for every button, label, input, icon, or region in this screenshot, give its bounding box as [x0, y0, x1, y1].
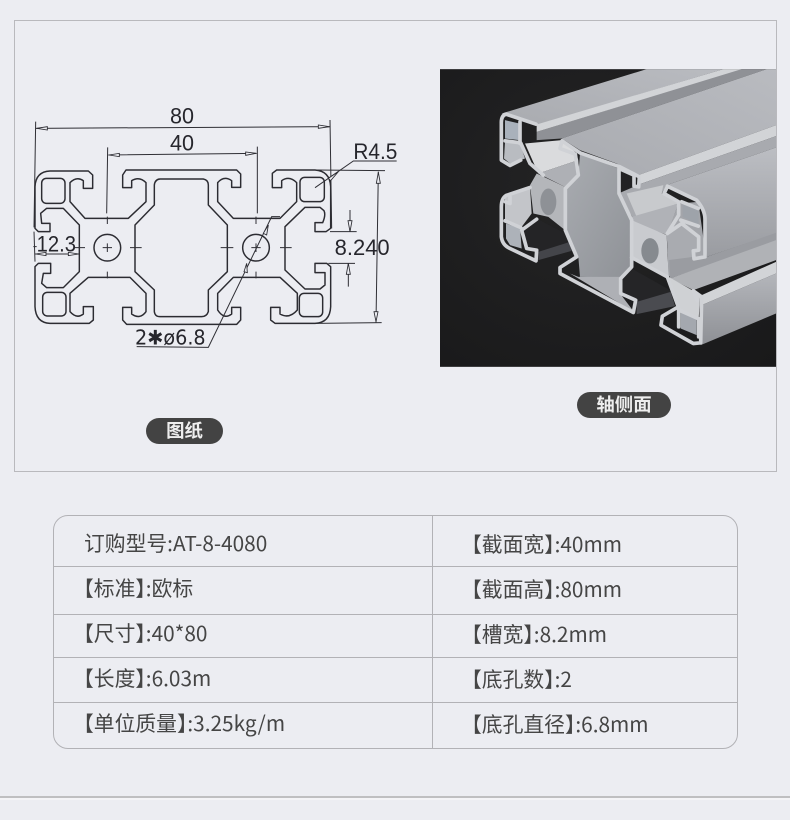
spec: section width: 【截面宽】:40mm	[461, 528, 622, 558]
badge: axial side view	[577, 392, 671, 418]
dimension labels: 2✱ø6.8	[135, 326, 206, 350]
spec: size: 【尺寸】:40*80	[73, 617, 207, 647]
profile outline	[35, 170, 331, 324]
badge: axial side view: 轴侧面	[596, 391, 652, 417]
dimension labels: 40	[170, 131, 194, 156]
badge: drawing	[146, 418, 223, 444]
dimension labels: 80	[170, 103, 194, 128]
spec: order number: 订购型号:AT-8-4080	[84, 527, 267, 557]
cut section thin walls	[501, 114, 705, 344]
dimension labels	[37, 103, 397, 350]
spec: section height: 【截面高】:80mm	[461, 573, 622, 603]
technical drawing of 4080 profile	[33, 103, 397, 350]
dimension labels: 12.3	[37, 231, 76, 256]
dimension arrowheads	[36, 125, 380, 322]
extrusion long faces	[502, 69, 776, 345]
table frame	[53, 515, 738, 749]
column divider	[432, 516, 433, 748]
dimension labels: 8.240	[335, 235, 390, 260]
central hollow interior	[565, 154, 632, 277]
spec: length: 【长度】:6.03m	[73, 662, 211, 692]
bore holes	[94, 234, 269, 261]
spec: bottom hole diameter: 【底孔直径】:6.8mm	[461, 708, 649, 738]
spec: unit mass: 【单位质量】:3.25kg/m	[73, 707, 285, 737]
dimension lines	[33, 120, 397, 347]
central hollow	[135, 179, 227, 317]
panel: drawing and photo frame	[14, 20, 777, 472]
spec: standard: 【标准】:欧标	[73, 572, 193, 602]
photo: aluminium extrusion isometric view	[440, 69, 776, 367]
spec: number of bottom holes: 【底孔数】:2	[461, 663, 572, 693]
dimension labels: R4.5	[353, 139, 397, 164]
photo background	[440, 69, 776, 367]
bolt hole webs	[530, 174, 669, 277]
badge: drawing: 图纸	[166, 417, 203, 443]
interior surfaces seen through the section	[504, 120, 700, 335]
spec: slot width: 【槽宽】:8.2mm	[461, 618, 607, 648]
corner cavities	[42, 177, 324, 317]
